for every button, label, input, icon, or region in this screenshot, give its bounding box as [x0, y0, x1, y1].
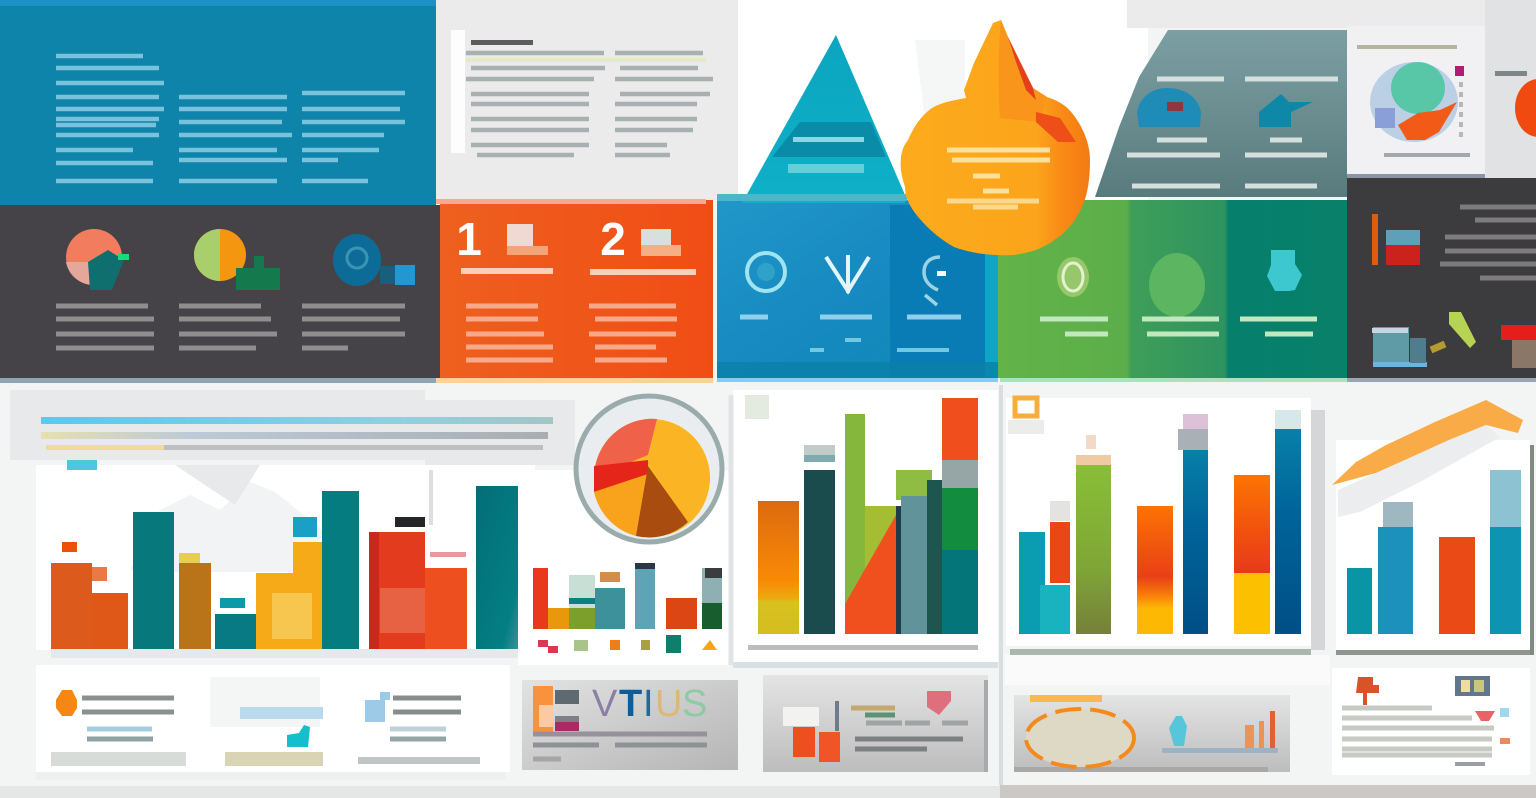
icon: green ring: [1057, 257, 1089, 297]
number 1: 1: [456, 213, 482, 265]
text lines: [1342, 708, 1494, 755]
icon: red pin: [1356, 677, 1379, 705]
icon: blue outline: [365, 692, 390, 722]
text lines: [1040, 319, 1317, 334]
chart tag: [67, 460, 97, 470]
text lines: [866, 720, 968, 726]
title letters: T: [619, 683, 642, 725]
panel heading bar: [471, 40, 533, 45]
icon: ring: [747, 253, 785, 291]
legend icons: [538, 635, 717, 653]
icon: mixed circle chart: [1370, 62, 1464, 142]
icon: green and orange circle: [194, 229, 280, 290]
icon: coral circle: [66, 229, 129, 290]
icon: cyan check: [287, 725, 310, 747]
text lines: [82, 698, 174, 712]
grey shading under line: [1338, 425, 1500, 517]
number 2: 2: [600, 213, 626, 265]
icon: V mark: [826, 255, 869, 293]
panel: notes card: [1332, 668, 1530, 775]
icon: orange square: [1008, 398, 1044, 434]
icon: red block: [1501, 325, 1536, 368]
heading marks: [851, 706, 895, 710]
text lines: [393, 698, 461, 712]
title letters: S: [682, 683, 707, 725]
panel: grey card with badge: [1014, 695, 1290, 772]
footer strip: [0, 785, 1536, 798]
icon: C mark: [924, 257, 940, 305]
bars: [1347, 470, 1521, 634]
panel: blue text panel: [0, 0, 436, 205]
panel: teal triangle: [717, 35, 907, 203]
panel: top strip light: [1127, 0, 1485, 28]
panel: small chart with pie: [518, 396, 730, 665]
icon spot: [937, 271, 946, 276]
text lines: [533, 732, 707, 736]
text columns: [56, 56, 405, 181]
text lines on flame: [947, 150, 1050, 191]
icon: column bars: [1372, 327, 1445, 367]
mid card shape: [210, 677, 320, 727]
bars: [51, 486, 518, 649]
header lines: [41, 417, 553, 450]
panel: grey card with bars: [763, 675, 988, 772]
panel: trend chart: [1332, 400, 1534, 655]
text lines: [1127, 79, 1338, 186]
title letters: U: [655, 683, 682, 725]
badge outline: [1026, 709, 1134, 767]
icon: document: [507, 224, 548, 255]
panel: grey trapezoid panel: [1095, 30, 1347, 197]
text lines: [461, 271, 696, 272]
icon: teal hexagon: [1267, 250, 1302, 291]
panel: dark right panel: [1347, 178, 1536, 382]
icon: pink pin: [927, 691, 951, 715]
icon: orange hexagon: [56, 690, 77, 716]
text lines: [740, 314, 961, 320]
panel: green icon panel: [998, 200, 1347, 382]
title letters: [592, 683, 707, 725]
bars: [758, 398, 978, 634]
icon: small bars: [1245, 711, 1275, 750]
icon: color blocks: [533, 686, 579, 732]
icon: red bars: [793, 701, 840, 762]
icon: small bars: [1372, 214, 1420, 265]
chart: pie: [576, 396, 722, 542]
green mark: [865, 712, 895, 718]
mark: [1475, 711, 1495, 721]
text columns: [56, 306, 405, 348]
text lines: [466, 53, 713, 155]
panel: blue icon panel: [717, 200, 998, 382]
icon: flame: [901, 20, 1090, 255]
text lines: [1440, 207, 1536, 278]
axis label: [748, 645, 978, 650]
chart legend mark: [745, 395, 769, 419]
chart: small bars: [533, 563, 722, 629]
panel: far right grey card: [1485, 0, 1536, 178]
icon: green marker: [1449, 312, 1476, 348]
panel: side icon card: [1347, 26, 1485, 178]
icon: blue circle: [333, 234, 415, 286]
panel: chart card with green bars: [731, 390, 998, 668]
panel: light text panel: [436, 0, 738, 200]
panel: VTIUS card: [522, 680, 738, 770]
panel: dark panel with icons: [0, 205, 440, 383]
icon: red circle fragment: [1515, 79, 1536, 137]
title letters: V: [592, 683, 618, 725]
heading lines: [1030, 695, 1102, 702]
panel: main bar chart: [36, 417, 553, 658]
area line: [1332, 400, 1523, 485]
panel: feature row card: [36, 665, 510, 780]
icon: blue cloud: [1137, 88, 1201, 127]
icon: cyan bottle: [1169, 716, 1187, 746]
icon: chart card: [641, 229, 681, 256]
bars: [1019, 410, 1301, 634]
icon: blue house: [1259, 94, 1313, 127]
icon: coin: [1455, 676, 1490, 696]
panel: orange numbered panel: [436, 199, 713, 383]
icon: green circle: [1149, 253, 1205, 317]
panel: tall bar chart: [1006, 398, 1325, 655]
icon: document: [783, 707, 819, 726]
title letters: I: [643, 683, 654, 725]
